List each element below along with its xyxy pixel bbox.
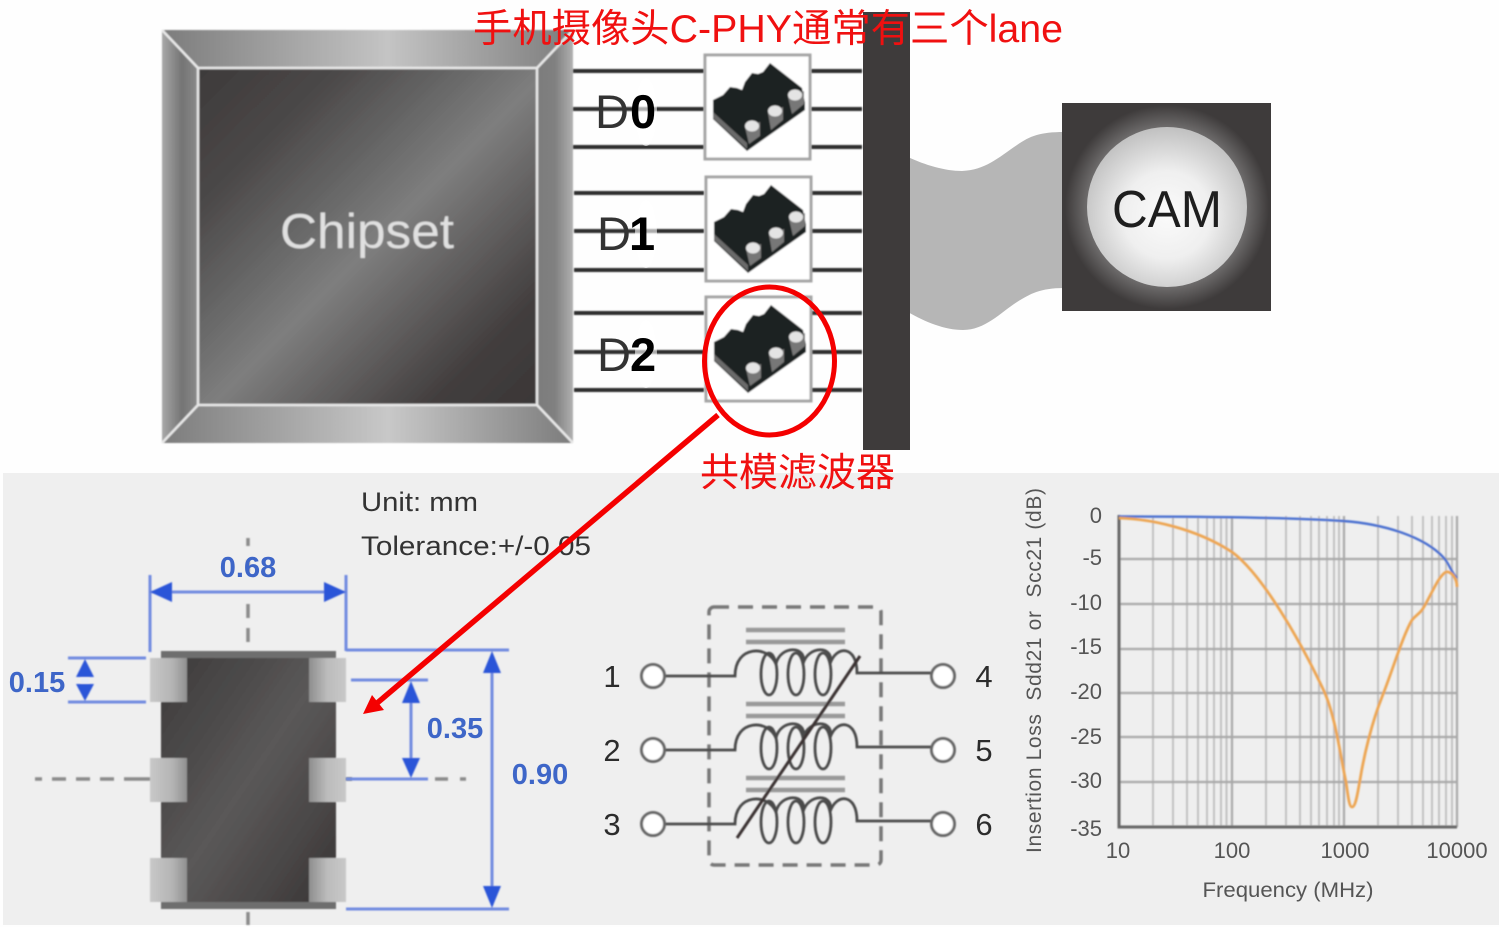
label D2: 2 [630, 328, 656, 381]
equivalent circuit schematic [642, 607, 954, 865]
pin numbers: 4 [975, 659, 993, 694]
label D2: D [597, 328, 631, 381]
label D2 [597, 320, 657, 388]
pin numbers: 5 [975, 733, 993, 768]
flex cable to camera [908, 132, 1064, 330]
label: Chipset: Chipset [280, 205, 454, 259]
pin numbers: 1 [603, 659, 621, 694]
filter box D1 [706, 177, 811, 281]
label D0: D [595, 85, 629, 138]
y axis tick labels: 0 [1090, 503, 1102, 528]
y axis tick labels: -35 [1070, 816, 1102, 841]
panel: component details background [3, 473, 1499, 925]
pin numbers [603, 659, 993, 842]
x axis tick labels: 1000 [1321, 838, 1369, 863]
label D1: D [597, 207, 631, 260]
label D0: 0 [630, 85, 656, 138]
label D1: 1 [629, 207, 655, 260]
y axis tick labels: -25 [1070, 724, 1102, 749]
red arrow [363, 415, 718, 714]
label: common mode filter: 共模滤波器 [700, 452, 895, 495]
filter box D2 [706, 297, 811, 401]
chipset package [162, 30, 573, 443]
filter box D0 [705, 55, 810, 159]
pin numbers: 6 [975, 807, 993, 842]
y axis tick labels: -15 [1070, 634, 1102, 659]
pin numbers: 2 [603, 733, 621, 768]
label D0 [595, 78, 657, 146]
insertion loss chart [1119, 515, 1457, 827]
red circle highlighting filter [704, 287, 834, 435]
y axis tick labels: -10 [1070, 590, 1102, 615]
camera module [1062, 103, 1271, 311]
pin numbers: 3 [603, 807, 621, 842]
tolerance text: Tolerance:+/-0.05 [361, 531, 591, 561]
y axis tick labels [1070, 503, 1102, 841]
data lines [573, 71, 862, 390]
connector bar [863, 12, 910, 450]
y axis title: Insertion Loss Sdd21 or Scc21 (dB) [1023, 488, 1046, 853]
dimension value 0.68: 0.68 [220, 552, 276, 584]
label D1 [597, 200, 657, 268]
x axis title: Frequency (MHz) [1202, 879, 1374, 902]
y axis tick labels: -30 [1070, 768, 1102, 793]
title: 手机摄像头C-PHY通常有三个lane [473, 8, 1063, 51]
curve: Scc21 [1119, 518, 1457, 807]
x axis tick labels [1106, 838, 1488, 863]
component outline drawing [35, 538, 466, 925]
dimension value 0.90: 0.90 [512, 759, 568, 791]
x axis tick labels: 10000 [1426, 838, 1488, 863]
dimension lines and arrows [68, 575, 509, 909]
y axis tick labels: -5 [1082, 545, 1102, 570]
x axis tick labels: 100 [1214, 838, 1250, 863]
x axis tick labels: 10 [1106, 838, 1130, 863]
curve: Sdd21 [1119, 516, 1457, 578]
dimension value 0.35: 0.35 [427, 713, 483, 745]
dimension value 0.15: 0.15 [9, 667, 65, 699]
label: CAM: CAM [1112, 181, 1222, 239]
unit text: Unit: mm [361, 487, 478, 517]
y axis tick labels: -20 [1070, 679, 1102, 704]
